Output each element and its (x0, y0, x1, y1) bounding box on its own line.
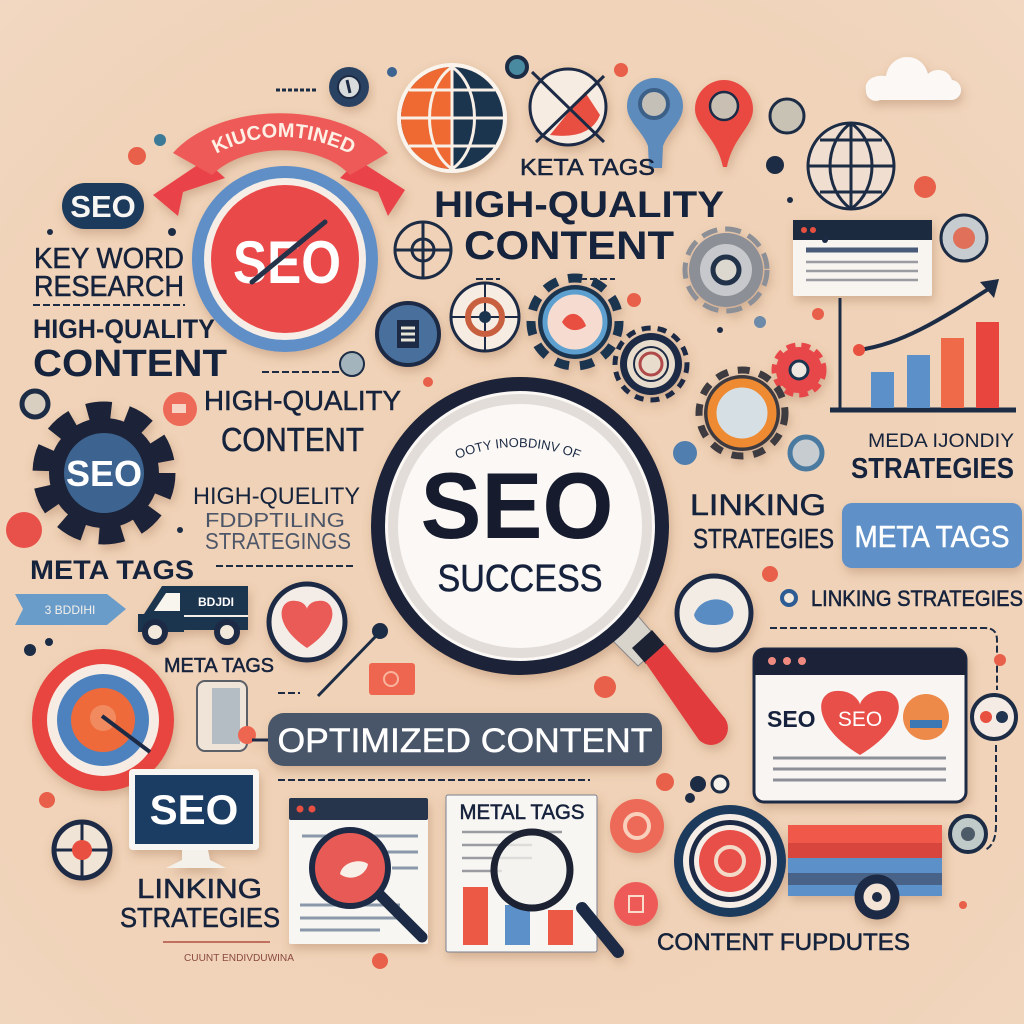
text: high-quelity strategies: HIGH-QUELITY (193, 483, 360, 510)
text: linking strategies bottom: LINKING (137, 873, 262, 904)
icon: heart disc (269, 584, 345, 660)
icon: target disc (451, 283, 519, 351)
text: meta tags left: META TAGS (30, 555, 194, 585)
icon: small blue disc (673, 437, 822, 469)
icon: bullseye with banner (674, 805, 942, 917)
icon: red target (32, 649, 174, 791)
icon: monitor SEO: SEO (150, 786, 238, 833)
text: linking strategies center right: LINKING (690, 489, 826, 522)
icon: small ring left (22, 391, 197, 426)
text: linking strategies center right: STRATEGIES (693, 523, 834, 554)
big SEO badge (192, 166, 378, 352)
label: SEO pill (62, 183, 144, 229)
text: linking strategies bottom (120, 873, 294, 964)
icon: monitor SEO (129, 769, 259, 868)
icon: red disc left (6, 512, 42, 548)
ribbon banner (153, 113, 409, 222)
chart: growth bars (830, 279, 1016, 412)
icon: lever line (318, 623, 415, 696)
heading: high-quality content top: HIGH-QUALITY (434, 184, 724, 225)
icon: small teal ring (507, 57, 527, 77)
icon: orange gear (699, 370, 785, 456)
text: high-quality content left: CONTENT (33, 343, 227, 385)
icon: browser banner (793, 220, 932, 296)
icon: red gear (774, 345, 824, 395)
icon: dark SEO gear (41, 410, 167, 536)
icon: crosshair (395, 222, 451, 278)
icon: phone (197, 681, 256, 751)
text: content updates: CONTENT FUPDUTES (657, 929, 910, 956)
icon: document glyph disc (377, 303, 439, 365)
icon: globe (397, 63, 507, 173)
text: linking strategies bottom: CUUNT ENDIVDUWINA (184, 953, 294, 964)
icon: delivery truck (138, 586, 248, 642)
text: high-quelity strategies (193, 483, 360, 554)
text: high-quality content left: HIGH-QUALITY (33, 314, 215, 344)
text: high-quelity strategies: FDDPTILING (205, 510, 345, 532)
icon: blue disc mid right (677, 576, 751, 650)
icon: blue gear (531, 278, 619, 366)
icon: grey gear (685, 229, 767, 311)
icon: red disc (610, 799, 664, 926)
panel: browser with hearts: SEO (838, 708, 882, 731)
ribbon banner: KIUCOMTINED (211, 123, 354, 154)
text: keta tags: KETA TAGS (520, 154, 655, 180)
icon: central magnifying glass (368, 377, 734, 754)
icon: blue arrow tag (15, 594, 126, 625)
text: high-quality content left (33, 314, 227, 385)
button: meta tags (842, 503, 1022, 568)
panel: metal tags page: METAL TAGS (460, 801, 584, 824)
icon: central magnifying glass: SUCCESS (438, 558, 602, 600)
text: high-quality content middle (204, 385, 401, 458)
panel: browser with hearts: SEO (767, 706, 816, 732)
icon: small ring right (950, 695, 1016, 852)
text: keyword research: RESEARCH (34, 271, 184, 303)
connector lines (33, 279, 997, 850)
icon: small grey ring (770, 99, 804, 133)
button: optimized content: OPTIMIZED CONTENT (278, 722, 652, 760)
button: meta tags: META TAGS (854, 519, 1010, 554)
text: linking strategies bottom: STRATEGIES (120, 902, 280, 933)
text: keyword research: KEY WORD (34, 243, 184, 275)
icon: red map pin (695, 80, 753, 167)
text: high-quality content middle: CONTENT (221, 421, 364, 458)
icon: wire globe (808, 123, 894, 209)
icon: dark SEO gear: SEO (66, 453, 142, 494)
decorative dark dots (24, 67, 828, 803)
icon: blue arrow tag: 3 BDDIHI (45, 603, 95, 617)
icon: compass target (530, 69, 606, 145)
icon: compass wheel (54, 822, 110, 878)
heading: high-quality content top: CONTENT (464, 224, 674, 268)
text: keyword research (34, 243, 184, 303)
text: linking strategies center right (690, 489, 834, 554)
text: meta strategies right: MEDA IJONDIY (868, 431, 1014, 452)
text: high-quality content middle: HIGH-QUALITY (204, 385, 401, 416)
heading: high-quality content top (434, 184, 724, 268)
panel: browser with hearts (754, 649, 966, 802)
panel: metal tags page (446, 795, 618, 952)
panel: page with red magnifier (289, 798, 428, 944)
icon: central magnifying glass: SEO (420, 453, 614, 558)
icon: central magnifying glass: OOTY INOBDINV OF (456, 438, 582, 458)
icon: small ring top (329, 67, 369, 107)
icon: small disc right (941, 215, 987, 261)
icon: delivery truck: BDJDI (198, 595, 234, 609)
text: high-quelity strategies: STRATEGINGS (205, 528, 351, 554)
icon: cloud (866, 57, 961, 101)
icon: blue map pin (627, 78, 683, 168)
text: meta strategies right (851, 431, 1014, 485)
text: meta tags lower: META TAGS (164, 655, 274, 677)
big SEO badge: SEO (233, 229, 341, 296)
icon: dark ring gear (615, 328, 687, 400)
button: optimized content (252, 713, 662, 766)
label: SEO pill: SEO (70, 189, 136, 224)
